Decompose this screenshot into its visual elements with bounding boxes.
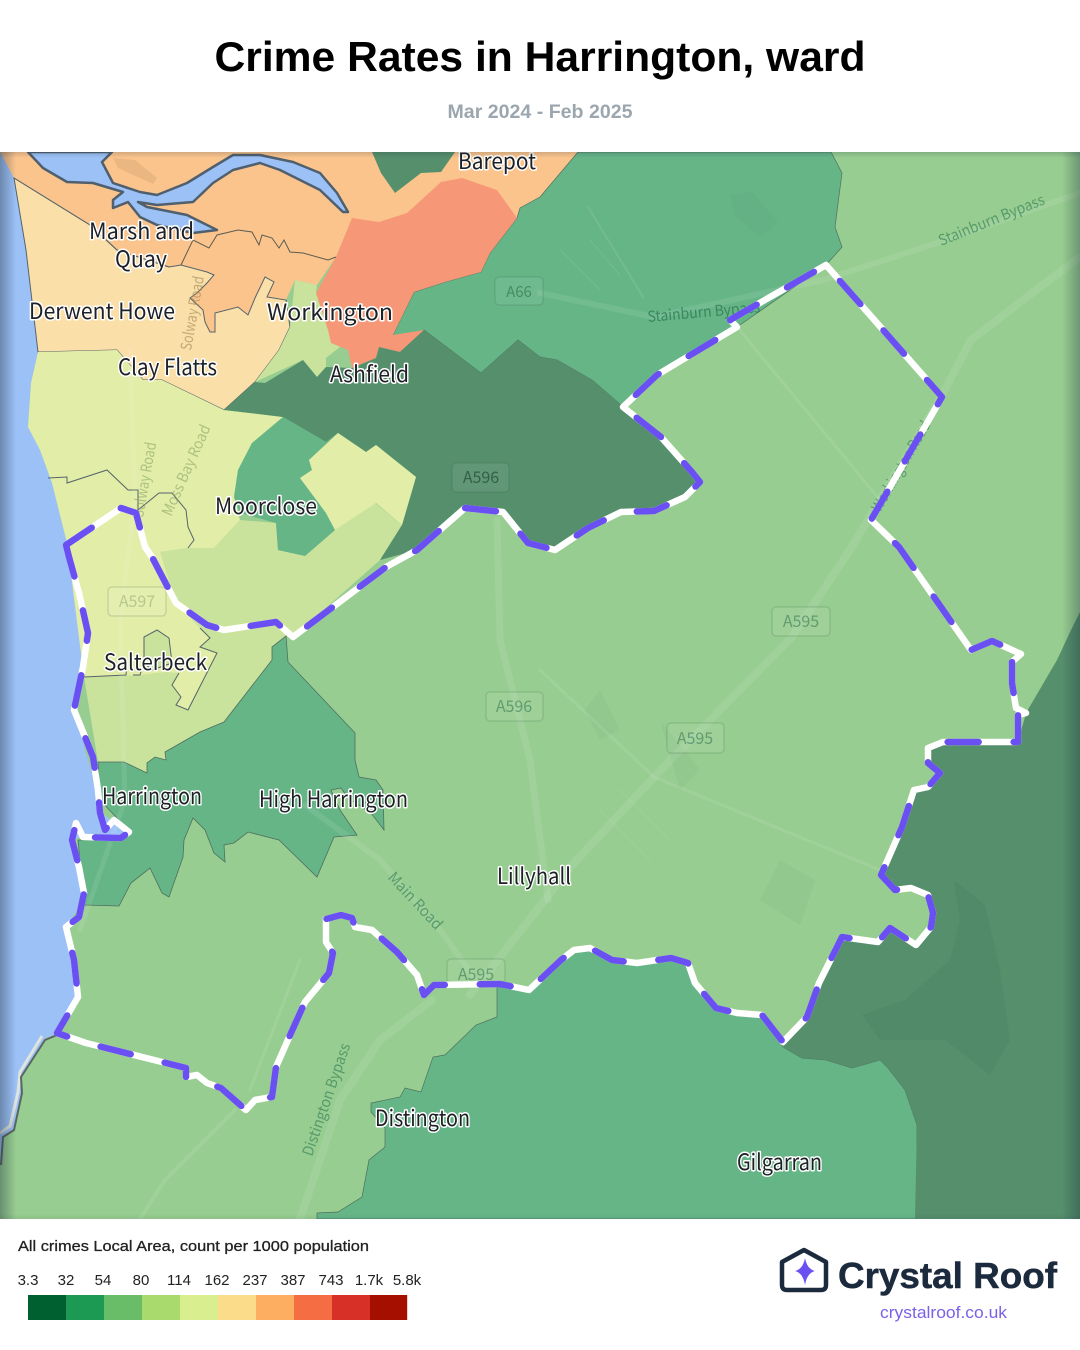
- region: yellow Derwent Howe and Clay Flatts: [14, 178, 290, 410]
- pale lime boundary lines: [48, 470, 194, 548]
- region: medium green Harrington: [78, 636, 384, 906]
- place labels: Gilgarran: [737, 1145, 822, 1177]
- place labels: Workington: [267, 295, 393, 327]
- legend scale: 54: [95, 1272, 111, 1289]
- road labels: Distington Bypass: [297, 1040, 355, 1159]
- ward boundary: Harrington: [57, 265, 1026, 1110]
- wordmark: Crystal Roof: [838, 1255, 1058, 1296]
- place labels: Derwent Howe: [29, 294, 175, 326]
- legend scale: 114: [167, 1272, 191, 1289]
- sea: [0, 152, 125, 1165]
- place labels: Lillyhall: [497, 859, 571, 891]
- region: dark green Ashfield: [224, 330, 700, 560]
- road labels: A595: [458, 961, 494, 985]
- Salterbeck boundaries: [84, 628, 217, 710]
- legend scale: 237: [242, 1272, 268, 1289]
- boundary between orange and yellow: [14, 178, 169, 267]
- road shields: [108, 277, 830, 983]
- region: light lime at Workington: [255, 280, 340, 382]
- date range subtitle: Mar 2024 - Feb 2025: [448, 102, 633, 123]
- region: yellow-green Salterbeck: [84, 503, 402, 773]
- legend scale: 387: [280, 1272, 306, 1289]
- legend scale: 1.7k: [355, 1272, 384, 1289]
- road labels: Workington Road: [866, 417, 935, 516]
- logo: Crystal Roof: [782, 1250, 1058, 1322]
- road labels: A597: [119, 588, 155, 612]
- place labels: Distington: [375, 1101, 470, 1133]
- icon: house with star: [782, 1250, 826, 1290]
- shoreline south: [0, 1035, 57, 1165]
- legend scale: 3.3: [18, 1272, 38, 1289]
- place labels: Quay: [115, 242, 167, 274]
- tan industrial patch in Marsh and Quay: [113, 158, 157, 184]
- yellow-green island: [144, 630, 172, 670]
- place labels: Barepot: [458, 144, 536, 176]
- road labels: Moss Bay Road: [156, 421, 215, 519]
- region: peach-orange Marsh and Quay: [0, 152, 578, 332]
- river Derwent and harbour: [28, 152, 348, 233]
- road network: [80, 193, 1080, 1219]
- place labels: Salterbeck: [104, 645, 208, 677]
- road labels: [119, 189, 1048, 1159]
- place labels: Clay Flatts: [118, 350, 217, 382]
- place labels: Harrington: [102, 779, 202, 811]
- website: crystalroof.co.uk: [880, 1303, 1008, 1322]
- legend scale: 5.8k: [393, 1272, 422, 1289]
- road labels: Main Road: [383, 867, 448, 934]
- legend scale: 80: [133, 1272, 149, 1289]
- place labels: Moorclose: [215, 489, 317, 521]
- legend scale: 743: [318, 1272, 344, 1289]
- road labels: Stainburn Bypass: [935, 189, 1048, 251]
- region: pale lime south of Clay Flatts: [28, 350, 283, 710]
- legend title: All crimes Local Area, count per 1000 population: [18, 1238, 369, 1255]
- road labels: A66: [506, 281, 532, 302]
- faint land-use patches: [585, 192, 815, 925]
- legend scale: 162: [204, 1272, 230, 1289]
- map: [0, 144, 1080, 1219]
- road labels: A595: [677, 725, 713, 749]
- place labels: Ashfield: [330, 357, 409, 389]
- darker woodland in south-east: [862, 880, 1010, 1075]
- road labels: A596: [496, 693, 532, 717]
- place labels: [29, 144, 822, 1177]
- region: medium green Distington and Gilgarran: [317, 948, 917, 1219]
- region: pale lime Moorclose: [300, 433, 416, 530]
- region: medium green Moorclose: [234, 417, 338, 556]
- region: medium green Stainburn: [393, 152, 842, 405]
- place labels: Marsh and: [89, 214, 194, 246]
- legend scale: 32: [58, 1272, 74, 1289]
- road labels: Solway Road: [175, 274, 209, 352]
- base area: light green crime band: [0, 152, 1080, 1219]
- region: dark green south-east: [783, 612, 1080, 1219]
- place labels: High Harrington: [259, 782, 408, 814]
- region: salmon Workington centre: [316, 178, 517, 368]
- Marsh ward boundary line: [181, 230, 336, 265]
- road labels: A596: [463, 464, 499, 488]
- legend scale: [18, 1272, 422, 1320]
- road labels: Solway Road: [127, 440, 161, 519]
- region: dark green Barepot: [372, 152, 455, 193]
- road labels: Stainburn Bypass: [647, 296, 761, 327]
- edge vignette: [0, 152, 16, 1219]
- road labels: A595: [783, 608, 819, 632]
- title: Crime Rates in Harrington, ward: [214, 33, 865, 80]
